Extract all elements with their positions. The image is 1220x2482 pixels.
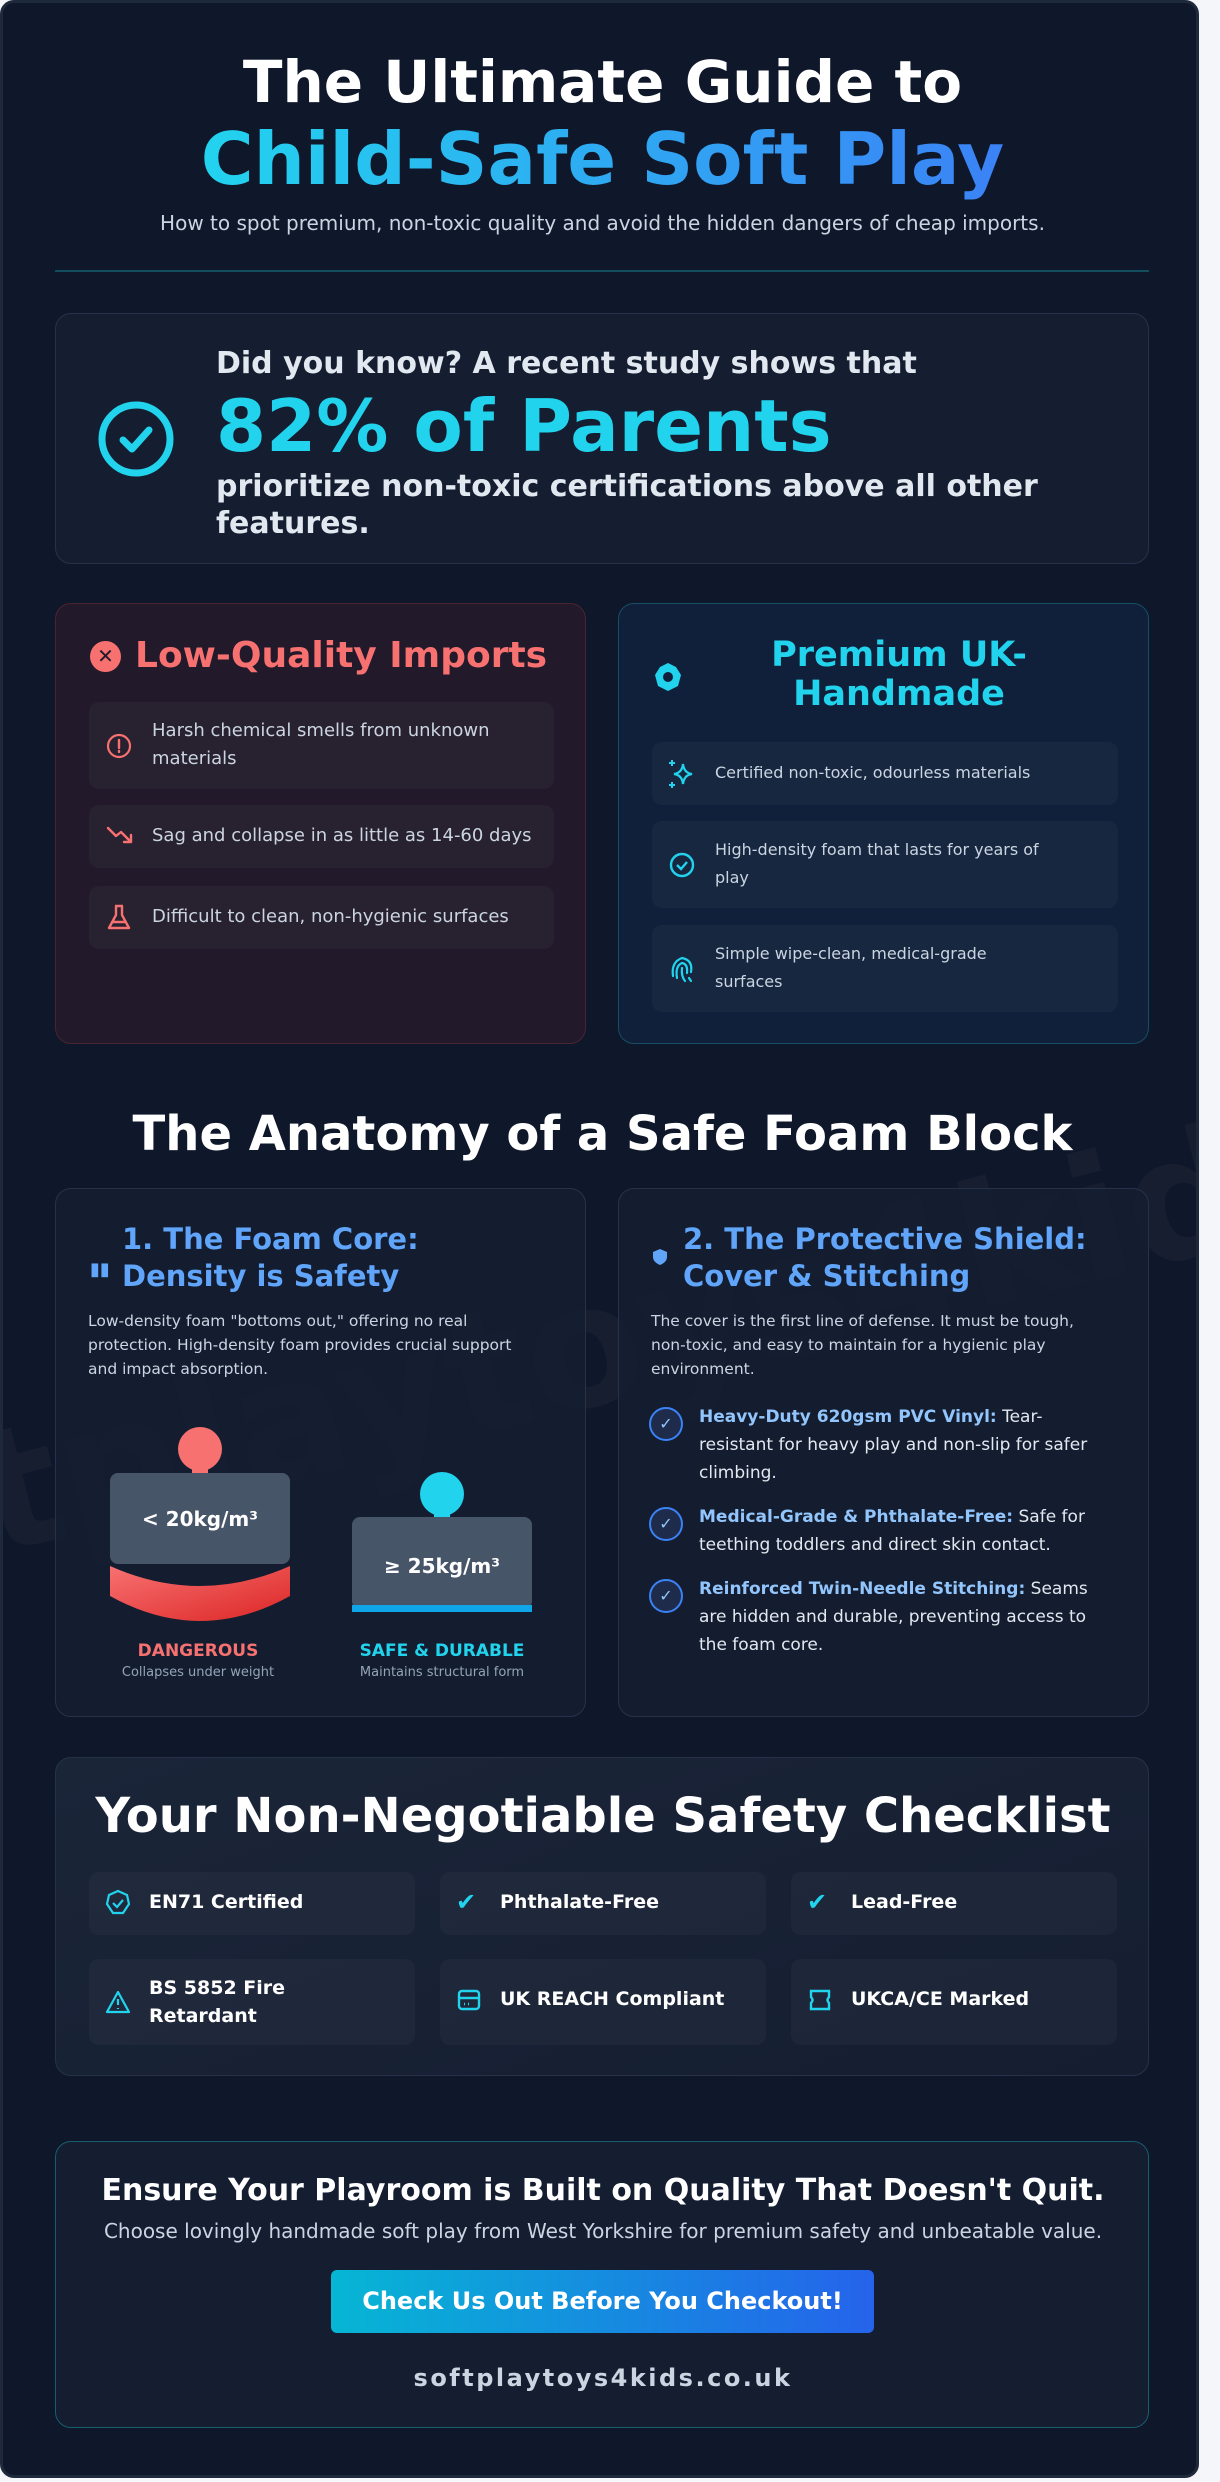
panel: foam core xyxy=(55,1188,586,1717)
icon: badge xyxy=(655,663,681,691)
item: ✔ xyxy=(456,1888,476,1916)
list: ✓ xyxy=(659,1414,673,1433)
heading: 1. The Foam Core: xyxy=(122,1222,419,1256)
item: EN71 Certified xyxy=(149,1891,303,1913)
heading: Premium UK- xyxy=(771,635,1027,675)
heading: Low-Quality Imports xyxy=(135,635,547,676)
button xyxy=(331,2270,874,2333)
heading: 2. The Protective Shield: xyxy=(683,1222,1087,1256)
item: Difficult to clean, non-hygienic surfaces xyxy=(152,906,509,927)
heading: Ensure Your Playroom is Built on Quality That Doesn't Quit. xyxy=(101,2173,1105,2208)
label: dangerous: DANGEROUS xyxy=(138,1641,258,1661)
button: Check Us Out Before You Checkout! xyxy=(362,2287,843,2315)
panel: low-quality imports xyxy=(55,603,586,1044)
panel: checklist xyxy=(55,1757,1149,2076)
text: Low-density foam "bottoms out," offering no real protection. High-density foam provides crucial support and impact absorption. xyxy=(88,1312,511,1378)
item xyxy=(652,742,1118,805)
item xyxy=(791,1959,1117,2045)
item: Retardant xyxy=(149,2005,257,2027)
illustration: high-density xyxy=(352,1472,532,1612)
heading: anatomy: The Anatomy of a Safe Foam Block xyxy=(133,1106,1072,1162)
item: UKCA/CE Marked xyxy=(851,1988,1029,2010)
label: dangerous xyxy=(122,1641,274,1680)
illustration: low-density xyxy=(110,1427,290,1621)
item xyxy=(440,1959,766,2045)
item: Sag and collapse in as little as 14-60 days xyxy=(152,825,532,846)
label: dangerous: Collapses under weight xyxy=(122,1665,274,1680)
item: Certified non-toxic, odourless materials xyxy=(715,763,1030,782)
stat text xyxy=(216,346,1038,541)
title: The Ultimate Guide to xyxy=(243,48,962,116)
item xyxy=(652,925,1118,1012)
list: Heavy-Duty 620gsm PVC Vinyl: Tear-resistant for heavy play and non-slip for safer climbing. xyxy=(699,1407,1087,1483)
heading: Cover & Stitching xyxy=(683,1259,970,1293)
item: High-density foam that lasts for years of play xyxy=(715,840,1039,887)
list: ✓ xyxy=(659,1514,673,1533)
label: safe: Maintains structural form xyxy=(360,1665,524,1680)
item: Harsh chemical smells from unknown materials xyxy=(152,720,490,769)
heading: Density is Safety xyxy=(122,1259,399,1293)
title xyxy=(201,48,1004,201)
item: ✔ xyxy=(807,1888,827,1916)
item: Lead-Free xyxy=(851,1891,957,1913)
text: Choose lovingly handmade soft play from West Yorkshire for premium safety and unbeatable value. xyxy=(104,2219,1102,2243)
heading: ▮▮ xyxy=(90,1259,110,1280)
icon: check circle xyxy=(98,402,174,476)
stat text: Did you know? A recent study shows that xyxy=(216,346,917,381)
heading: ✕ xyxy=(97,644,114,668)
item: Simple wipe-clean, medical-grade surfaces xyxy=(715,944,987,991)
item xyxy=(652,821,1118,908)
title: Child-Safe Soft Play xyxy=(201,117,1004,201)
stat callout xyxy=(55,313,1149,564)
item: BS 5852 Fire xyxy=(149,1977,285,1999)
stat text: prioritize non-toxic certifications above all other features. xyxy=(216,469,1038,541)
item xyxy=(440,1872,766,1935)
domain: softplaytoys4kids.co.uk xyxy=(414,2364,792,2392)
label: safe xyxy=(360,1641,524,1680)
subtitle: How to spot premium, non-toxic quality and avoid the hidden dangers of cheap imports. xyxy=(160,211,1045,235)
panel: call to action xyxy=(55,2141,1149,2428)
list: ✓ xyxy=(659,1586,673,1605)
item xyxy=(89,886,554,949)
item xyxy=(89,1959,415,2045)
panel: protective shield xyxy=(618,1188,1149,1717)
panel: premium uk-handmade xyxy=(618,603,1149,1044)
item: UK REACH Compliant xyxy=(500,1988,724,2010)
illustration: high-density: ≥ 25kg/m³ xyxy=(384,1554,500,1578)
item xyxy=(89,702,554,789)
heading: Your Non-Negotiable Safety Checklist xyxy=(95,1788,1111,1844)
illustration: low-density: < 20kg/m³ xyxy=(142,1507,258,1531)
heading xyxy=(90,1222,419,1293)
list: Medical-Grade & Phthalate-Free: Safe for teething toddlers and direct skin contact. xyxy=(699,1507,1085,1555)
heading xyxy=(653,1222,1087,1293)
list: Reinforced Twin-Needle Stitching: Seams are hidden and durable, preventing access to the foam core. xyxy=(699,1579,1088,1655)
heading xyxy=(771,635,1027,714)
item: Phthalate-Free xyxy=(500,1891,659,1913)
item xyxy=(89,805,554,868)
stat text: 82% of Parents xyxy=(216,384,832,468)
label: safe: SAFE & DURABLE xyxy=(360,1641,524,1661)
text: The cover is the first line of defense. It must be tough, non-toxic, and easy to maintain for a hygienic play environment. xyxy=(651,1312,1074,1378)
item xyxy=(89,1872,415,1935)
heading: Handmade xyxy=(793,674,1005,714)
list xyxy=(649,1407,1088,1655)
item xyxy=(791,1872,1117,1935)
